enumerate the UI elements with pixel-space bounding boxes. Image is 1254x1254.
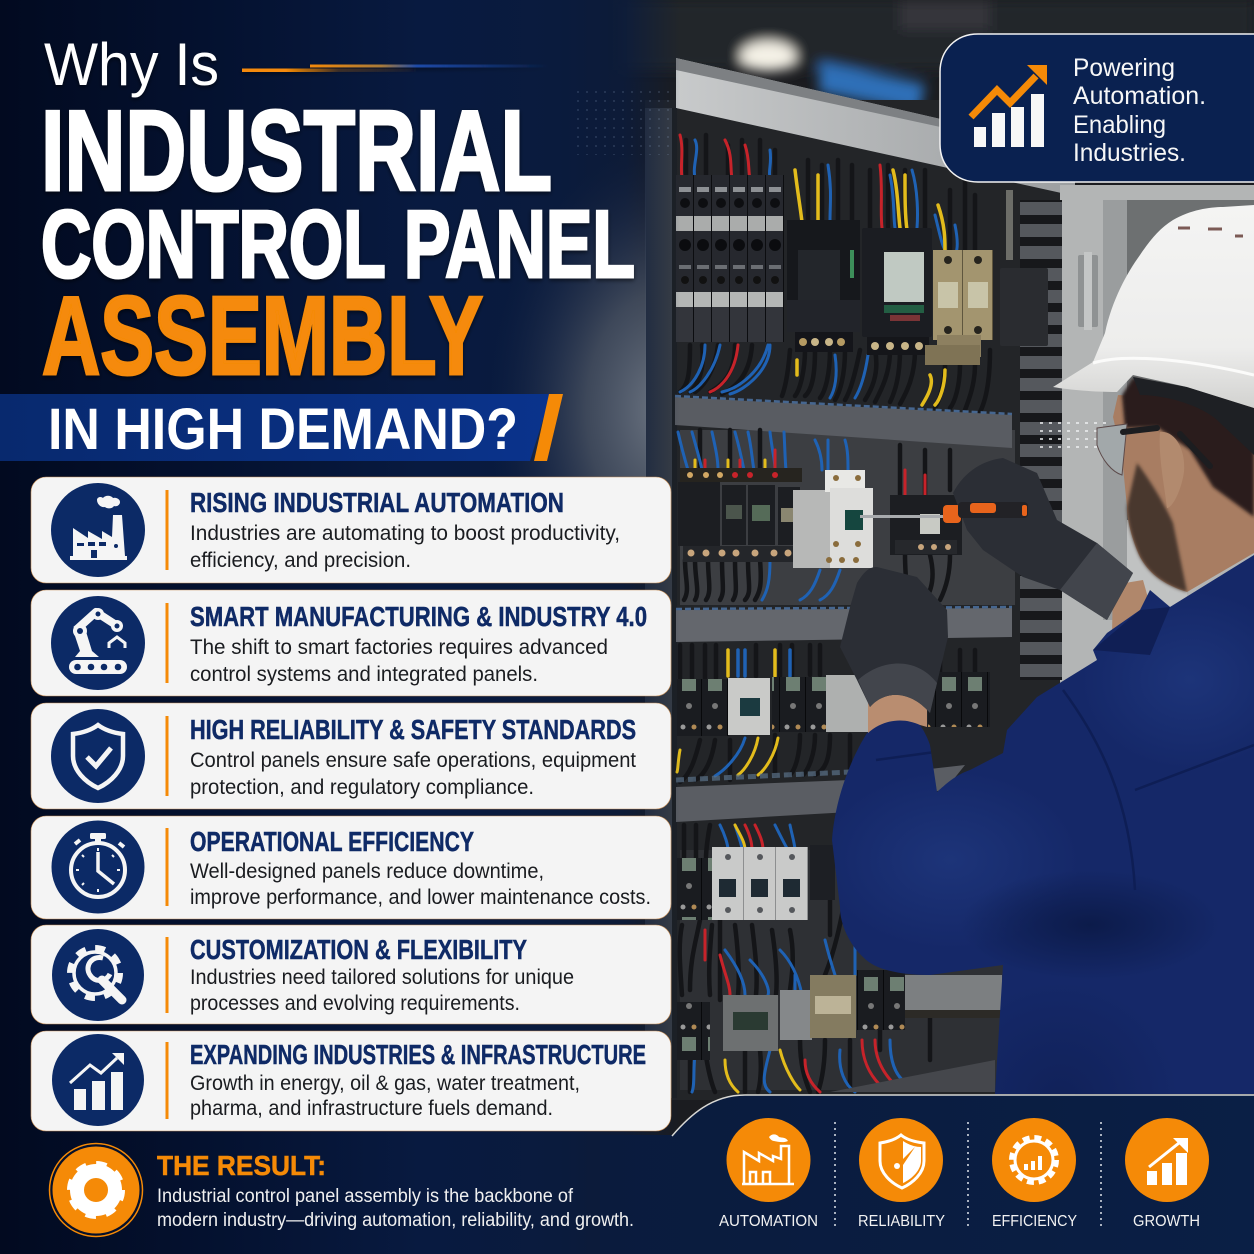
panel: rising industrial automation: [31, 477, 671, 583]
panel: operational efficiency: OPERATIONAL EFFICIENCY: [190, 826, 474, 857]
middle wiring: [677, 430, 950, 782]
item: growth: GROWTH: [1133, 1213, 1200, 1230]
panel: smart manufacturing and industry 4.0: [31, 590, 671, 696]
panel: high reliability and safety standards: Control panels ensure safe operations, equipment: [190, 749, 636, 772]
icon: bars with orange arrow: [971, 65, 1047, 147]
left navy panel background: [0, 0, 680, 1254]
icon: gear with chart: [1012, 1138, 1056, 1182]
raised forearm: [1112, 580, 1150, 635]
icon: gear with wrench: [70, 948, 122, 1000]
slogan: Industries.: [1073, 139, 1186, 167]
third DIN rail: [676, 765, 965, 822]
panel: smart manufacturing and industry 4.0: SMART MANUFACTURING & INDUSTRY 4.0: [190, 601, 647, 632]
heading: Why Is: Why Is: [44, 31, 219, 98]
panel: rising industrial automation: RISING INDUSTRIAL AUTOMATION: [190, 487, 564, 518]
cabinet body and frames: [645, 58, 1254, 1100]
panel: customization and flexibility: CUSTOMIZATION & FLEXIBILITY: [190, 934, 527, 965]
upper DIN rail: [675, 396, 1012, 448]
panel: high reliability and safety standards: HIGH RELIABILITY & SAFETY STANDARDS: [190, 714, 636, 745]
panel: high reliability and safety standards: protection, and regulatory compliance.: [190, 776, 534, 799]
photo: technician wiring an industrial control cabinet: [645, 0, 1254, 1100]
hard hat: [1053, 205, 1254, 408]
icon: stopwatch: [71, 833, 125, 897]
the result callout: THE RESULT:: [157, 1150, 326, 1181]
slogan: Automation.: [1073, 82, 1206, 110]
safety glasses: [1097, 424, 1210, 475]
panel: rising industrial automation: efficiency, and precision.: [190, 549, 411, 572]
jacket: [832, 555, 1254, 1094]
slogan: [1073, 54, 1206, 167]
icon: robot arm on conveyor: [69, 608, 127, 674]
slogan: Powering: [1073, 54, 1175, 82]
blurred factory backdrop: [620, 0, 1254, 112]
middle row modules: [678, 468, 962, 568]
item: growth: [1125, 1118, 1209, 1230]
item: reliability: RELIABILITY: [858, 1213, 945, 1230]
main title: Industrial Control Panel Assembly: [41, 88, 635, 398]
third row modules: [677, 645, 990, 736]
icon: shield with check: [73, 725, 123, 788]
slogan: Enabling: [1073, 111, 1166, 139]
panel: customization and flexibility: Industries need tailored solutions for unique: [190, 966, 574, 989]
icon: factory: [70, 496, 127, 560]
item: automation: AUTOMATION: [719, 1213, 818, 1230]
upper row of breakers and controllers: [676, 175, 1048, 365]
item: efficiency: [992, 1118, 1077, 1230]
panel: expanding industries and infrastructure: pharma, and infrastructure fuels demand.: [190, 1097, 553, 1120]
lower glove: [840, 567, 948, 713]
top right badge: [940, 34, 1254, 182]
panel: high reliability and safety standards: [31, 703, 671, 809]
banner: In High Demand?: IN HIGH DEMAND?: [48, 397, 518, 462]
main title: Industrial Control Panel Assembly: CONTROL PANEL: [41, 191, 635, 298]
upper glove: [953, 458, 1133, 620]
panel: customization and flexibility: [31, 925, 671, 1024]
second DIN rail: [676, 607, 1012, 642]
icon: growth bars and arrow: [1147, 1138, 1188, 1185]
icon: gear: [71, 1165, 121, 1215]
item: efficiency: EFFICIENCY: [992, 1213, 1077, 1230]
beard: [1127, 463, 1187, 592]
screwdriver: [860, 502, 1028, 523]
ear: [1160, 432, 1184, 508]
icon: rising bar chart: [70, 1053, 124, 1110]
the result callout: [50, 1144, 634, 1236]
panel: smart manufacturing and industry 4.0: control systems and integrated panels.: [190, 663, 538, 686]
neck and face: [1113, 395, 1254, 592]
wrist: [868, 683, 927, 733]
the result callout: Industrial control panel assembly is the backbone of: [157, 1186, 574, 1207]
panel: rising industrial automation: Industries are automating to boost productivity,: [190, 522, 620, 545]
panel: smart manufacturing and industry 4.0: The shift to smart factories requires advanced: [190, 636, 608, 659]
door frame and hinge: [1060, 185, 1254, 720]
item: reliability: [858, 1118, 945, 1230]
bottom right summary bar: [600, 1095, 1254, 1254]
the result callout: modern industry—driving automation, reliability, and growth.: [157, 1210, 634, 1231]
hard hat harness: [1133, 377, 1254, 455]
icon: half-filled shield: [880, 1135, 924, 1188]
panel: operational efficiency: [31, 816, 671, 919]
upper wiring: [680, 135, 990, 412]
panel: expanding industries and infrastructure: Growth in energy, oil & gas, water treatment,: [190, 1072, 580, 1095]
main title: Industrial Control Panel Assembly: ASSEMBLY: [42, 274, 483, 398]
technician: [832, 205, 1254, 1094]
panel: operational efficiency: Well-designed panels reduce downtime,: [190, 860, 544, 883]
panel: expanding industries and infrastructure: EXPANDING INDUSTRIES & INFRASTRUCTURE: [190, 1039, 646, 1070]
heading: Why Is: [44, 31, 548, 98]
main title: Industrial Control Panel Assembly: INDUSTRIAL: [41, 88, 552, 215]
hair: [1122, 378, 1254, 517]
panel: operational efficiency: improve performance, and lower maintenance costs.: [190, 886, 651, 909]
lower row modules and wiring: [677, 825, 1002, 1092]
panel: expanding industries and infrastructure: [31, 1031, 671, 1131]
item: automation: [719, 1118, 818, 1230]
icon: factory outline: [742, 1134, 794, 1184]
panel: customization and flexibility: processes and evolving requirements.: [190, 992, 520, 1015]
